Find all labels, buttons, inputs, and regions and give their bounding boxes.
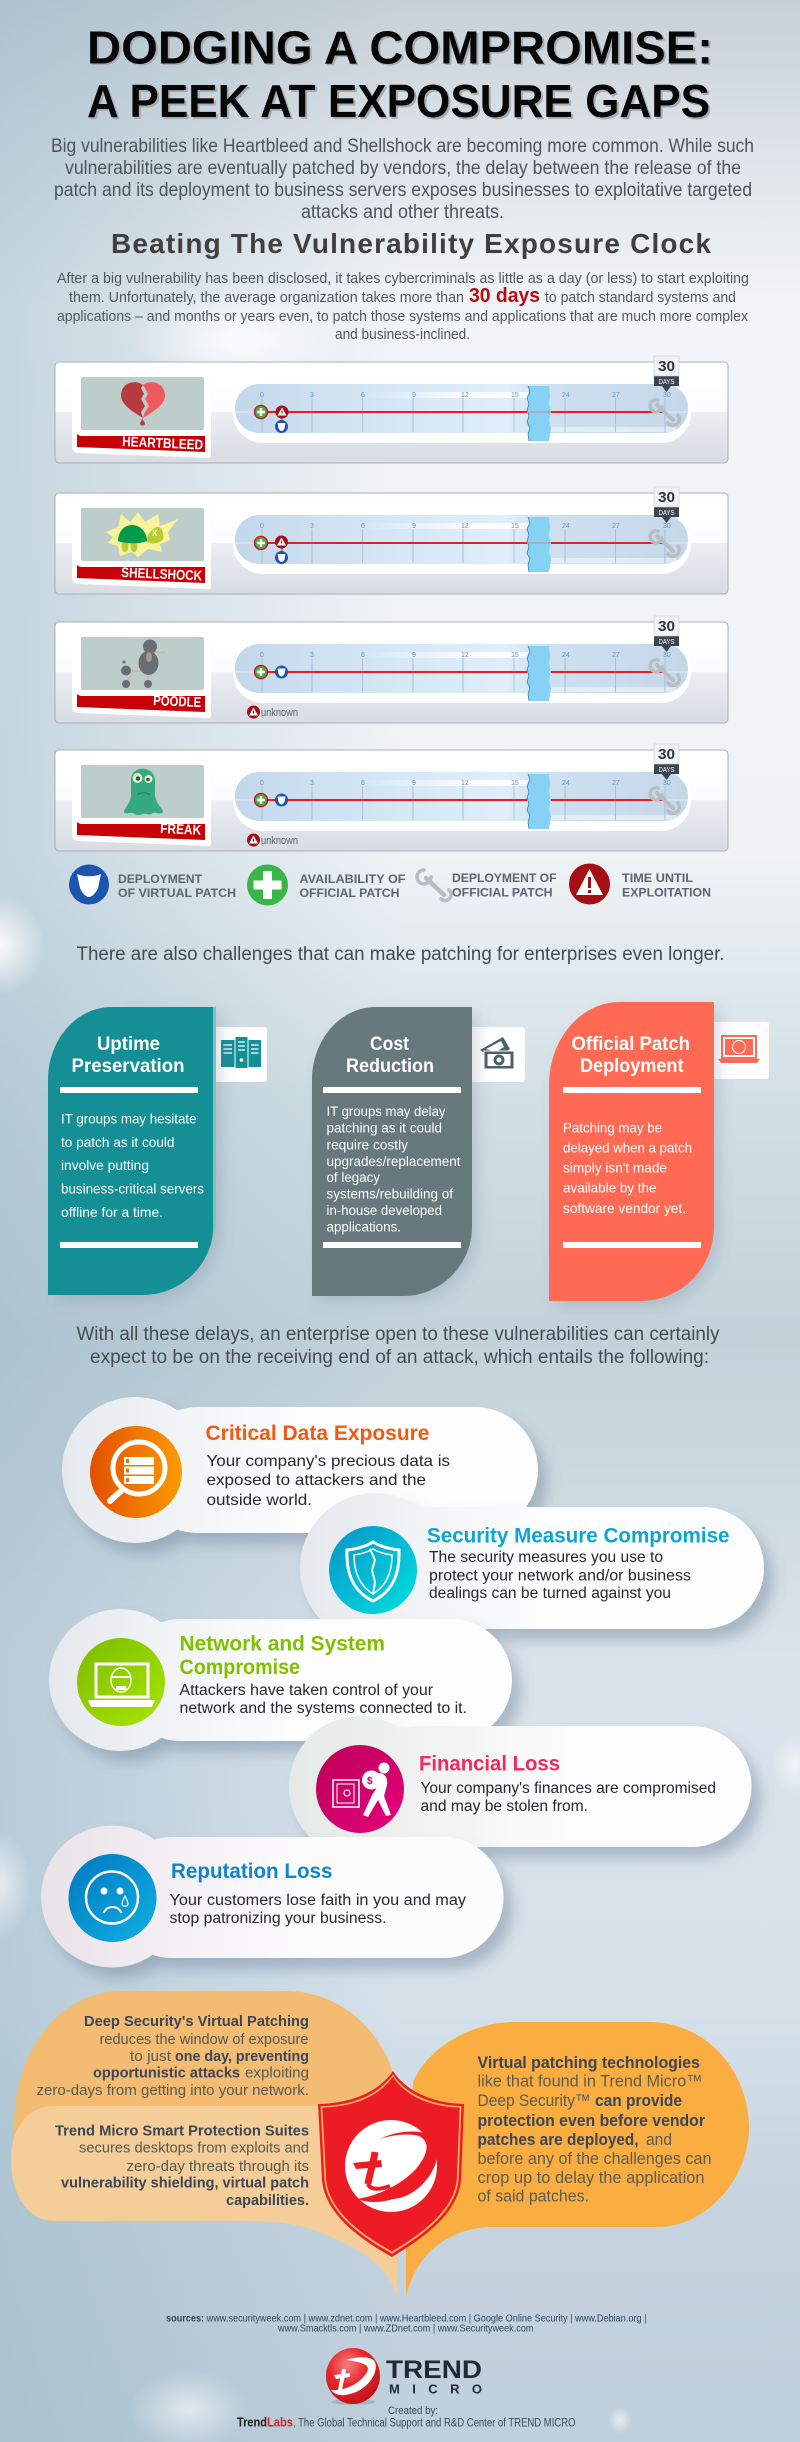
icon: magnifier over data [90,1426,182,1518]
bubble: smart protection suites [11,2106,397,2296]
pill text: exposed to attackers and the [206,1472,426,1489]
bubble text: capabilities. [226,2192,309,2209]
legend item: availability of official patch: AVAILABILITY OF [300,872,406,886]
bubble text: to just [130,2048,172,2065]
bubble text: Trend Micro Smart Protection Suites [55,2122,309,2140]
pill text [180,1682,467,1717]
panel: cost reduction [312,1007,525,1296]
note: unknown exploitation time: unknown [261,835,298,847]
credit: Trend [237,2414,267,2430]
bubble text [55,2122,309,2209]
card title: Cost [370,1034,410,1055]
note: unknown exploitation time [247,834,298,847]
card title [72,1034,184,1077]
bubble text: reduces the window of exposure [100,2031,308,2048]
timeline: heartbleed: 24 [562,392,570,399]
legend item: deployment of virtual patch: OF VIRTUAL PATCH [118,886,236,900]
logo: trend micro [326,2348,482,2405]
badge: 30 days: 30 [658,489,675,506]
bubble text: of said patches. [478,2186,589,2206]
timeline: heartbleed: 3 [310,392,314,399]
pill heading: Network and System [180,1632,385,1656]
legend item: availability of official patch: OFFICIAL PATCH [300,886,400,900]
pill text [429,1549,691,1602]
card text: in-house developed [326,1203,442,1218]
pill text: Your company's precious data is [206,1453,450,1470]
icon: sad face [68,1854,156,1942]
card text: software vendor yet. [563,1200,686,1216]
badge: 30 days [654,616,679,652]
card text: systems/rebuilding of [326,1186,453,1202]
bubble text: crop up to delay the application [478,2168,704,2187]
timeline: freak: 30 [663,780,671,787]
pill: reputation loss [41,1826,504,1968]
exposure paragraph: 30 days [469,285,540,307]
card text: Patching may be [563,1120,662,1136]
title: A PEEK AT EXPOSURE GAPS [87,75,710,127]
note: unknown exploitation time: unknown [261,707,298,719]
legend item: deployment of official patch [417,870,556,901]
card title: Reduction [346,1056,434,1077]
timeline: shellshock: 9 [412,523,416,530]
pill text: Your customers lose faith in you and may [170,1892,466,1909]
timeline: heartbleed [233,356,691,443]
intro text [51,136,754,223]
pill text: outside world. [206,1492,312,1509]
icon: servers [200,1027,267,1082]
timeline: freak: 6 [361,780,365,787]
bubble text: zero-day threats through its [126,2158,309,2175]
bubble text: vulnerability shielding, virtual patch [61,2174,309,2192]
timeline: heartbleed: 15 [511,392,519,399]
timeline: poodle: 0 [260,652,264,659]
credit: , The Global Technical Support and R&D Center of TREND MICRO [293,2418,576,2430]
badge: 30 days [654,487,679,523]
bubble text [36,2013,309,2099]
pill heading: Compromise [180,1656,300,1679]
badge: 30 days: DAYS [658,508,674,517]
card text: business-critical servers [61,1180,204,1196]
card text: require costly [326,1138,408,1152]
text: delays statement [76,1324,720,1368]
timeline: freak: 27 [612,780,620,787]
note: unknown exploitation time [247,706,298,719]
intro text: attacks and other threats. [301,202,504,223]
pill text: Attackers have taken control of your [180,1682,433,1699]
sources [166,2314,646,2334]
card: freak: FREAK [160,820,202,838]
timeline: heartbleed: 0 [260,392,264,399]
card text [563,1120,692,1216]
icon: broken heart [121,382,165,426]
icon: thief with safe: $ [367,1776,373,1787]
timeline: shellshock: 3 [310,523,314,530]
timeline: heartbleed: 27 [612,392,620,399]
bubble text: secures desktops from exploits and [79,2140,309,2156]
timeline: poodle: 24 [562,652,570,659]
timeline: shellshock: 15 [511,523,519,530]
card text: upgrades/replacement [326,1154,461,1169]
card text [326,1104,461,1234]
bubble text: and [646,2130,672,2149]
card title [572,1034,690,1077]
timeline: poodle: 30 [663,652,671,659]
text: delays statement: expect to be on the receiving end of an attack, which entails the following: [90,1347,709,1368]
pill text: stop patronizing your business. [170,1910,386,1927]
bubble: deep security virtual patching [14,1991,393,2150]
timeline: poodle: 9 [412,652,416,659]
legend item: time until exploitation: TIME UNTIL [622,871,693,885]
logo: trend micro: MICRO [389,2382,482,2396]
pill text: Your company's finances are compromised [420,1780,716,1797]
credit: Labs [267,2414,293,2430]
badge: 30 days: DAYS [658,377,674,386]
title [87,22,715,129]
credit: Created by: [388,2405,438,2417]
card title: Preservation [72,1056,184,1077]
legend item: deployment of virtual patch [69,864,236,904]
icon: freak monster [124,769,163,815]
panel: uptime preservation [48,1007,267,1295]
icon: poodle [121,640,165,688]
timeline: freak: 15 [511,780,519,787]
bubble text: opportunistic attacks [93,2064,240,2082]
card title: Official Patch [572,1034,690,1055]
bubble text: Virtual patching technologies [478,2053,700,2072]
panel: shellshock [55,487,728,594]
pill heading [180,1632,385,1679]
panel: official patch deployment [549,1002,769,1301]
panel: poodle [55,616,728,723]
timeline: shellshock: 6 [361,523,365,530]
badge: 30 days: DAYS [658,637,674,646]
timeline: freak [233,744,691,831]
icon: thief with safe [316,1745,404,1833]
timeline: poodle: 27 [612,652,620,659]
timeline: freak: 3 [310,780,314,787]
pill text: network and the systems connected to it. [180,1700,467,1717]
pill text: dealings can be turned against you [429,1585,671,1602]
exposure paragraph: and business-inclined. [335,327,470,343]
timeline: shellshock: 27 [612,523,620,530]
card text: available by the [563,1180,657,1196]
card text: offline for a time. [61,1204,163,1220]
exposure paragraph: applications – and months or years even, to patch those systems and applications that are much more complex [57,309,749,325]
legend item: deployment of virtual patch: DEPLOYMENT [118,872,203,886]
card text [61,1110,204,1220]
pill text: and may be stolen from. [420,1798,588,1815]
card: heartbleed [72,372,211,458]
bubble text: like that found in Trend Micro™ [478,2072,702,2090]
pill: reputation loss: Reputation Loss [171,1860,332,1883]
timeline: poodle: 12 [461,652,469,659]
card text: delayed when a patch [563,1140,692,1156]
icon: trend micro shield [318,2071,464,2257]
legend item: time until exploitation [569,864,711,904]
icon: turtle: X [152,529,158,538]
pill text [170,1892,466,1927]
card title: Deployment [580,1056,684,1077]
icon: cracked shield [329,1526,417,1614]
card title: Uptime [97,1034,160,1055]
pill text: The security measures you use to [429,1549,663,1566]
bubble text: zero-days from getting into your network. [36,2082,309,2099]
pill: security measure compromise: Security Measure Compromise [427,1524,730,1548]
card: heartbleed: HEARTBLEED [122,433,203,453]
timeline: heartbleed: 6 [361,392,365,399]
badge: 30 days: 30 [658,358,675,375]
title: DODGING A COMPROMISE: [87,22,713,74]
timeline: shellshock [233,487,691,574]
bubble: virtual patching technologies [406,2022,749,2296]
logo: trend micro: TREND [386,2356,482,2384]
card text: involve putting [61,1157,149,1173]
timeline: shellshock: 30 [663,523,671,530]
icon: money [460,1027,525,1082]
badge: 30 days [654,744,679,780]
sources: sources: www.securityweek.com | www.zdnet.com | www.Heartbleed.com | Google Online Security | www.Debian.org | [166,2314,646,2324]
legend item: deployment of official patch: DEPLOYMENT OF [452,871,556,885]
card text: applications. [326,1220,401,1234]
intro text: vulnerabilities are eventually patched by vendors, the delay between the release of the [65,158,741,179]
timeline: heartbleed: 12 [461,392,469,399]
timeline: freak: 24 [562,780,570,787]
card: shellshock: SHELLSHOCK [121,564,202,584]
intro text: Big vulnerabilities like Heartbleed and Shellshock are becoming more common. While such [51,136,754,157]
timeline: freak: 12 [461,780,469,787]
pill: network and system compromise [49,1609,512,1751]
exposure paragraph [57,271,749,343]
timeline: freak: 0 [260,780,264,787]
icon: laptop [700,1022,769,1079]
pill: financial loss [289,1716,752,1858]
bubble text: Deep Security's Virtual Patching [84,2013,309,2030]
bubble text [478,2053,712,2206]
sources: www.Smacktls.com | www.ZDnet.com | www.Securityweek.com [277,2324,534,2334]
pill: critical data exposure [62,1397,538,1543]
title: A PEEK AT EXPOSURE GAPS [89,77,712,129]
credit [237,2405,576,2430]
title: DODGING A COMPROMISE: [89,23,715,75]
card text: of legacy [326,1170,380,1185]
exposure paragraph: After a big vulnerability has been disclosed, it takes cybercriminals as little as a day (or less) to start exploiting [57,271,749,287]
timeline: poodle: 15 [511,652,519,659]
bubble text: patches are deployed, [478,2130,638,2149]
intro text: patch and its deployment to business servers exposes businesses to exploitative targeted [54,180,752,201]
timeline: poodle: 3 [310,652,314,659]
pill text [420,1780,716,1815]
badge: 30 days: DAYS [658,765,674,774]
icon: compromised laptop [77,1638,165,1726]
legend item: deployment of official patch: OFFICIAL PATCH [452,886,552,900]
bubble text: exploiting [245,2064,309,2082]
pill: critical data exposure: Critical Data Exposure [206,1422,430,1445]
badge: 30 days: 30 [658,746,675,763]
text: delays statement: With all these delays, an enterprise open to these vulnerabilities can certainly [76,1324,720,1345]
badge: 30 days: 30 [658,618,675,635]
pill: security measure compromise [300,1493,764,1643]
pill text: protect your network and/or business [429,1568,691,1584]
timeline: heartbleed: 30 [663,392,671,399]
panel: heartbleed [55,356,728,463]
card text: simply isn't made [563,1160,667,1176]
exposure paragraph: them. Unfortunately, the average organization takes more than [69,290,464,306]
timeline: shellshock: 12 [461,523,469,530]
exposure paragraph: to patch standard systems and [545,290,736,306]
badge: 30 days [654,356,679,392]
card: poodle: POODLE [153,692,202,710]
bubble text: before any of the challenges can [478,2149,712,2168]
timeline: heartbleed: 9 [412,392,416,399]
bubble text: can provide [595,2091,682,2110]
card: freak [72,760,211,846]
legend item: time until exploitation: EXPLOITATION [622,886,711,900]
card: shellshock [72,503,211,589]
card text: to patch as it could [61,1134,174,1150]
timeline: shellshock: 24 [562,523,570,530]
pill text [206,1453,450,1509]
timeline: poodle: 6 [361,652,365,659]
legend item: availability of official patch [247,864,406,906]
card: poodle [72,632,211,718]
card text: IT groups may hesitate [61,1110,197,1126]
bubble text: protection even before vendor [478,2111,705,2130]
heading: challenges: There are also challenges that can make patching for enterprises even longer. [76,944,724,965]
panel: freak [55,744,728,851]
bubble text: Deep Security™ [478,2091,590,2110]
timeline: shellshock: 0 [260,523,264,530]
card text: IT groups may delay [326,1104,446,1119]
card title [346,1034,434,1077]
timeline: freak: 9 [412,780,416,787]
bubble text: one day, preventing [175,2048,309,2065]
legend [69,864,711,906]
card text: patching as it could [326,1120,442,1136]
pill: financial loss: Financial Loss [419,1752,560,1776]
heading: beating the vulnerability exposure clock: Beating The Vulnerability Exposure Clock [111,228,711,259]
timeline: poodle [233,616,691,703]
